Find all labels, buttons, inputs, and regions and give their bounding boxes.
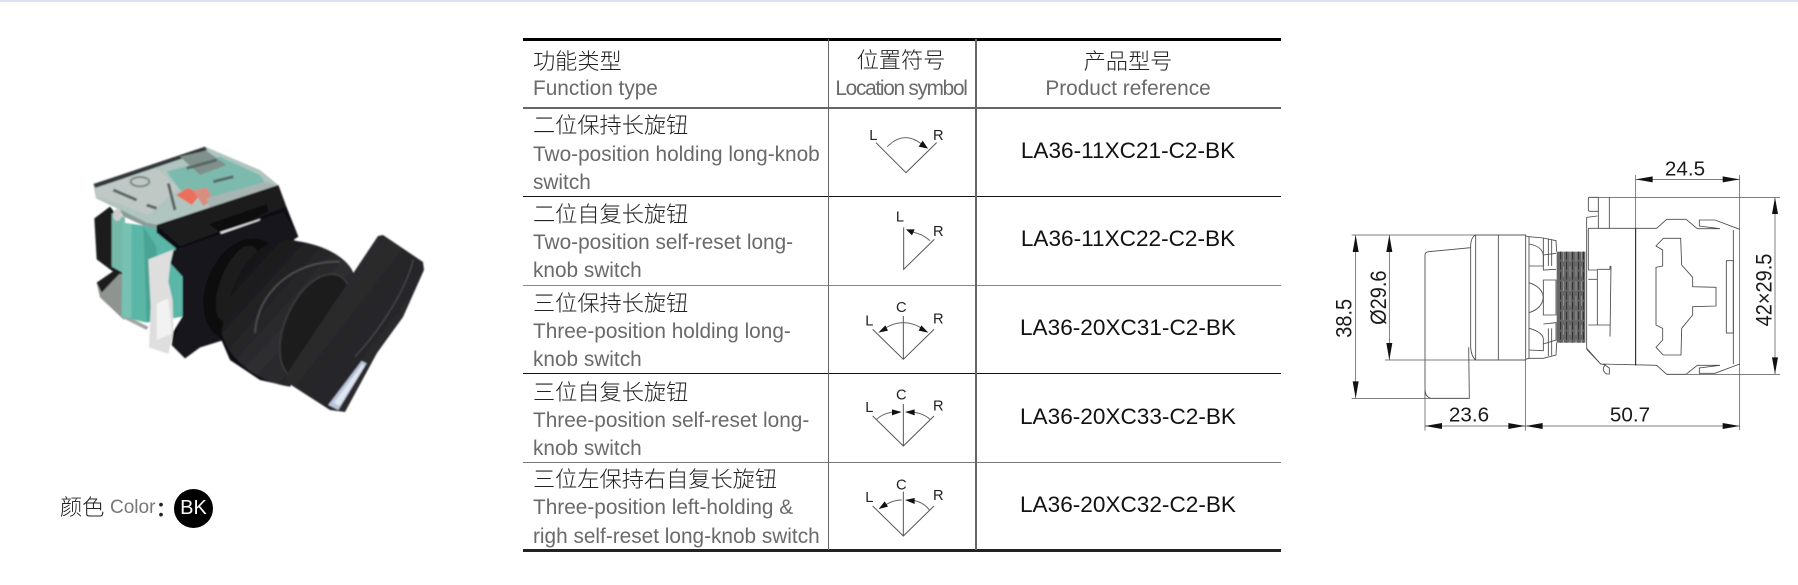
dimension 42×29.5: 42×29.5 bbox=[1753, 254, 1777, 326]
symbol row 1: two-position holding bbox=[869, 128, 944, 173]
symbol row 3: three-position holding: R bbox=[933, 312, 944, 328]
product reference: row 1: LA36-11XC21-C2-BK bbox=[1021, 138, 1235, 163]
symbol row 2: two-position self-reset bbox=[896, 210, 944, 269]
symbol row 2: two-position self-reset: L bbox=[896, 210, 904, 226]
product reference: row 3: LA36-20XC31-C2-BK bbox=[1020, 315, 1236, 340]
row 1 function text: Two-position holding long-knob bbox=[533, 143, 820, 166]
row 2 function text: knob switch bbox=[533, 258, 642, 282]
symbol row 4: three-position self-reset: R bbox=[933, 398, 944, 414]
rear terminals bbox=[94, 207, 124, 277]
symbol row 2: two-position self-reset: R bbox=[933, 224, 944, 240]
symbol row 5: three-position left-holding right self-reset bbox=[865, 477, 944, 536]
dimension Ø29.6 bbox=[1367, 235, 1526, 360]
header: product reference: Product reference bbox=[1045, 77, 1211, 100]
row 4 function text bbox=[533, 380, 809, 460]
row 1 function text: 二位保持长旋钮 bbox=[533, 113, 688, 138]
row 3 function text: 三位保持长旋钮 bbox=[533, 291, 688, 316]
row 1 function text: switch bbox=[533, 171, 591, 194]
dimension 23.6 bbox=[1425, 360, 1525, 431]
symbol row 5: three-position left-holding right self-reset: C bbox=[896, 477, 907, 493]
row 4 function text: knob switch bbox=[533, 437, 642, 460]
row 3 function text: Three-position holding long- bbox=[533, 320, 791, 343]
header: location symbol: 位置符号 bbox=[857, 48, 945, 73]
row 2 function text bbox=[533, 202, 793, 282]
dimension Ø29.6: Ø29.6 bbox=[1367, 270, 1391, 325]
outline: knob and bezel bbox=[1425, 235, 1557, 398]
header: function type bbox=[533, 49, 658, 100]
product photo: long-knob selector switch bbox=[92, 146, 425, 413]
dimension 23.6: 23.6 bbox=[1449, 404, 1489, 427]
table: functions, symbols, references bbox=[523, 38, 1281, 552]
product reference: row 4: LA36-20XC33-C2-BK bbox=[1020, 404, 1236, 429]
symbol row 4: three-position self-reset: L bbox=[865, 400, 873, 416]
header: product reference bbox=[1045, 49, 1211, 100]
color legend: black bbox=[60, 489, 213, 528]
row 5 function text: Three-position left-holding & bbox=[533, 496, 793, 519]
dimension drawing bbox=[1333, 158, 1780, 431]
symbol row 3: three-position holding bbox=[865, 300, 944, 359]
clear housing bbox=[93, 147, 278, 227]
dimension 42×29.5 bbox=[1588, 197, 1780, 374]
dimension 24.5: 24.5 bbox=[1665, 158, 1705, 181]
symbol row 1: two-position holding: R bbox=[933, 128, 944, 144]
handle bbox=[286, 235, 424, 412]
dimension 24.5 bbox=[1636, 158, 1740, 430]
symbol row 5: three-position left-holding right self-reset: R bbox=[933, 488, 944, 504]
product reference: row 5: LA36-20XC32-C2-BK bbox=[1020, 492, 1236, 517]
color legend: black: ： bbox=[156, 493, 176, 522]
symbol row 3: three-position holding: C bbox=[896, 300, 907, 316]
dimension 38.5: 38.5 bbox=[1333, 299, 1357, 338]
header: product reference: 产品型号 bbox=[1084, 49, 1172, 74]
header: location symbol bbox=[835, 48, 967, 100]
row 2 function text: 二位自复长旋钮 bbox=[533, 202, 688, 227]
dimension 38.5 bbox=[1333, 235, 1526, 398]
color legend: black: 颜色 bbox=[60, 495, 104, 520]
symbol row 4: three-position self-reset: C bbox=[896, 387, 907, 403]
symbol row 5: three-position left-holding right self-reset: L bbox=[865, 490, 873, 506]
thread bbox=[1557, 252, 1585, 343]
row 5 function text: 三位左保持右自复长旋钮 bbox=[533, 467, 777, 492]
color chip BK bbox=[174, 489, 213, 528]
row 3 function text bbox=[533, 291, 791, 371]
header: location symbol: Location symbol bbox=[835, 77, 967, 100]
white clip bbox=[148, 249, 174, 354]
row 5 function text: righ self-reset long-knob switch bbox=[533, 524, 820, 548]
row 1 function text bbox=[533, 113, 820, 194]
row 3 function text: knob switch bbox=[533, 348, 642, 371]
row 5 function text bbox=[533, 467, 820, 548]
header: function type: Function type bbox=[533, 77, 658, 100]
dark silhouette: frame and rotary body bbox=[157, 185, 354, 387]
outline: switch body bbox=[1587, 197, 1740, 374]
row 4 function text: 三位自复长旋钮 bbox=[533, 380, 688, 405]
symbol row 3: three-position holding: L bbox=[865, 313, 873, 329]
color chip BK: BK bbox=[180, 497, 207, 519]
dimension 50.7: 50.7 bbox=[1610, 404, 1650, 427]
dimension 50.7 bbox=[1526, 404, 1740, 429]
row 4 function text: Three-position self-reset long- bbox=[533, 409, 809, 432]
product reference: row 2: LA36-11XC22-C2-BK bbox=[1021, 226, 1235, 250]
header: function type: 功能类型 bbox=[533, 49, 622, 74]
teal body bbox=[122, 223, 183, 323]
row 2 function text: Two-position self-reset long- bbox=[533, 231, 793, 254]
symbol row 1: two-position holding: L bbox=[869, 128, 877, 144]
symbol row 4: three-position self-reset bbox=[865, 387, 944, 446]
location symbols column bbox=[865, 128, 944, 537]
color legend: black: Color bbox=[110, 497, 155, 518]
